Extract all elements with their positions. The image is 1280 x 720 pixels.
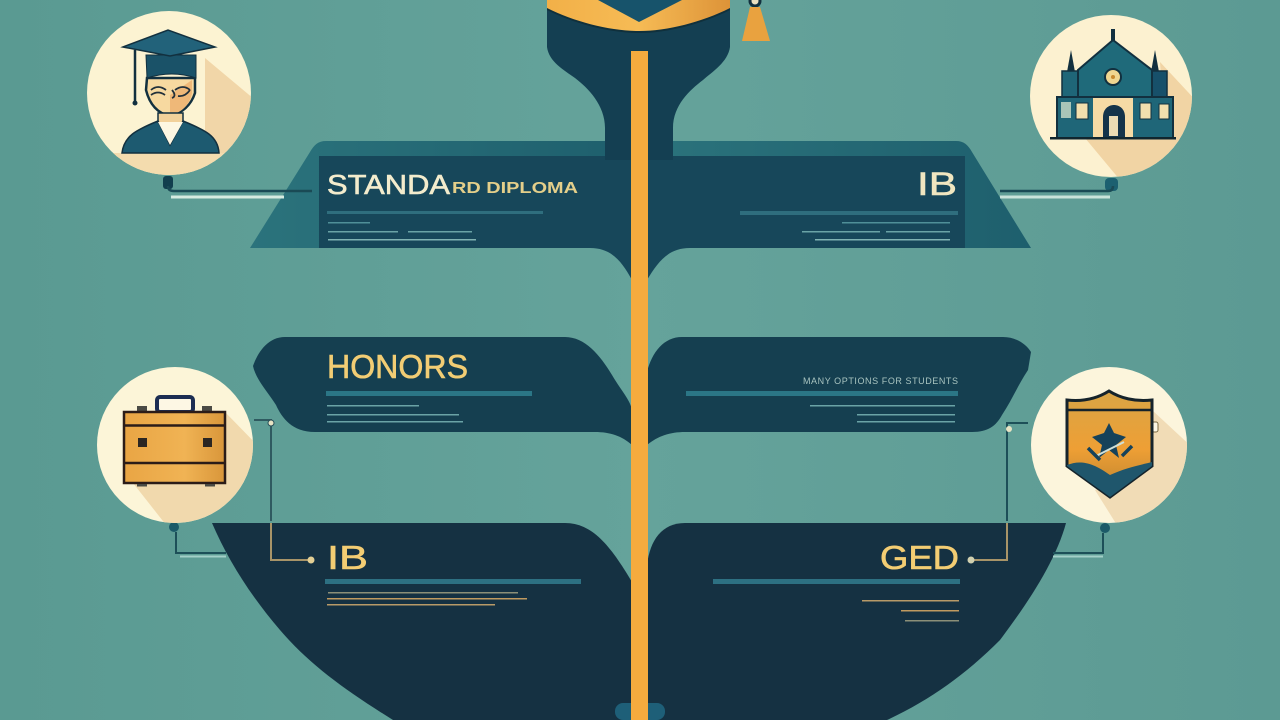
panel: honors [253, 337, 632, 445]
panel: middle right [647, 337, 1031, 445]
connector: honors to IB [254, 420, 314, 564]
panel: IB top right [647, 141, 1031, 280]
heading: GED: GED [880, 539, 959, 576]
heading: standard diploma: STANDA [327, 169, 450, 200]
icon: briefcase [97, 367, 262, 530]
connector: middle right to GED [968, 423, 1028, 564]
panel: GED bottom right [647, 523, 1066, 720]
heading: IB bottom: IB [327, 539, 368, 576]
heading: standard diploma [327, 169, 579, 200]
top collar and neck [547, 0, 730, 160]
heading: IB top: IB [917, 166, 957, 202]
connector: standard diploma [163, 176, 312, 198]
heading: standard diploma: RD DIPLOMA [452, 180, 579, 197]
connector: shield [1053, 523, 1110, 558]
connector: IB top [1000, 178, 1118, 198]
panel: standard diploma [250, 141, 632, 280]
center gold spine [615, 51, 665, 720]
icon: shield [1031, 367, 1195, 530]
icon: school building [1030, 15, 1200, 180]
small caption text: MANY OPTIONS FOR STUDENTS [803, 376, 958, 386]
panel: IB bottom left [212, 523, 632, 720]
heading: honors: HONORS [327, 348, 468, 385]
connector: briefcase [169, 522, 226, 558]
icon: graduate [87, 11, 260, 180]
tassel [742, 0, 770, 41]
